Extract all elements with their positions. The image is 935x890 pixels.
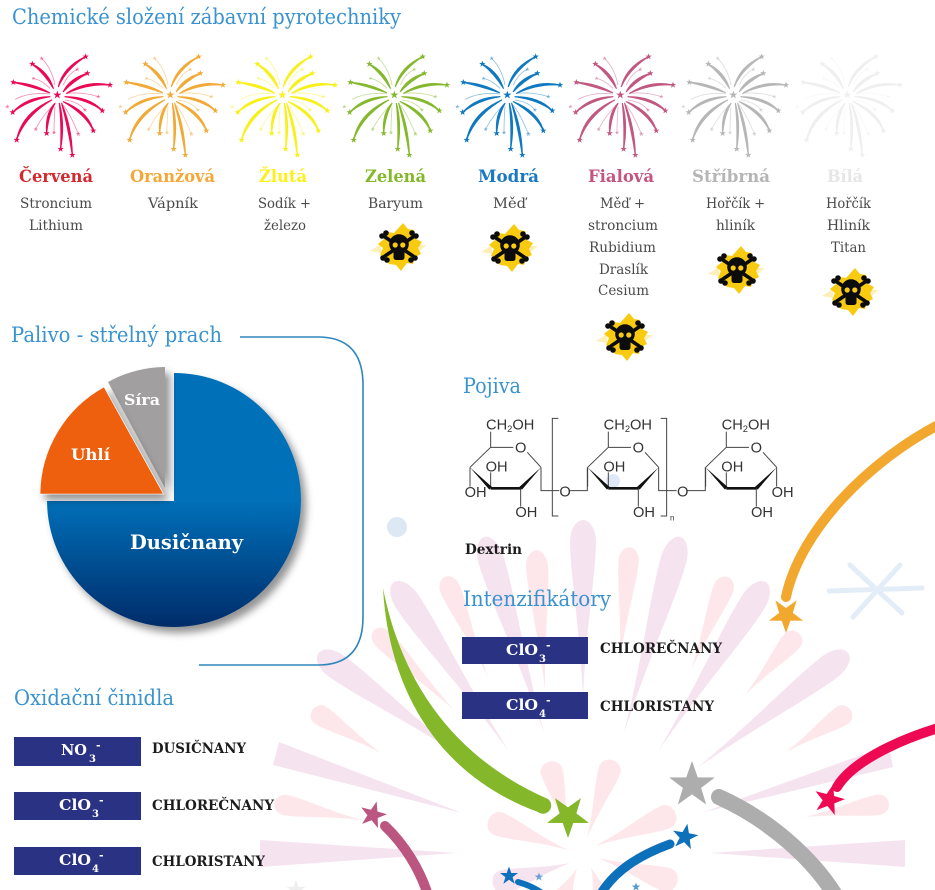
- colour column: oranžová: Vápník: [147, 196, 199, 212]
- shooting star: red: [811, 726, 935, 816]
- heading: palivo: Palivo - střelný prach: [11, 323, 222, 347]
- icon: toxic skull: [822, 268, 879, 316]
- colour column: bílá: Titan: [831, 240, 866, 256]
- intensifier row: ClO3: CHLOREČNANY: [600, 639, 723, 657]
- colour column: stříbrná: [692, 167, 770, 294]
- slice: síra: [108, 367, 165, 488]
- firework: červená: [5, 53, 113, 158]
- oxidiser row: ClO4: CHLORISTANY: [152, 854, 266, 870]
- chemical structure: dextrin: OH: [603, 460, 625, 476]
- colour column: zelená: Baryum: [368, 196, 423, 212]
- colour column: červená: Červená: [19, 166, 93, 186]
- chemical structure: dextrin: OH: [515, 505, 537, 521]
- shooting star: blue: [600, 821, 700, 890]
- intensifier row: ClO4: -: [546, 694, 551, 707]
- colour column: stříbrná: Stříbrná: [692, 167, 770, 186]
- intensifier row: ClO3: [462, 637, 723, 665]
- colour column: fialová: Cesium: [598, 283, 649, 299]
- oxidiser row: ClO3: CHLOREČNANY: [152, 796, 275, 814]
- title: Chemické složení zábavní pyrotechniky: [12, 5, 401, 29]
- colour column: žlutá: železo: [264, 218, 306, 234]
- icon: toxic skull: [370, 223, 427, 271]
- oxidiser row: ClO4: [14, 847, 266, 875]
- chemical structure: dextrin: 2: [743, 424, 748, 434]
- colour column: žlutá: Žlutá: [259, 166, 307, 186]
- chemical structure: dextrin: O: [677, 484, 688, 500]
- oxidiser row: ClO4: ClO: [59, 851, 91, 869]
- colour column: fialová: Draslík: [599, 262, 648, 278]
- chemical structure: dextrin: OH: [630, 417, 652, 433]
- heading: intenzifikátory: Intenzifikátory: [463, 587, 611, 611]
- chemical structure: dextrin: CH: [604, 417, 625, 433]
- chemical structure: dextrin: [465, 417, 794, 523]
- chemical structure: dextrin: OH: [512, 417, 534, 433]
- intensifier row: ClO3: -: [546, 639, 551, 652]
- colour column: fialová: Rubidium: [589, 240, 656, 256]
- chemical structure: dextrin: OH: [721, 460, 743, 476]
- firework: žlutá: [230, 53, 338, 158]
- chemical structure: dextrin: 2: [507, 424, 512, 434]
- oxidiser row: NO3: DUSIČNANY: [152, 739, 247, 757]
- firework: oranžová: [118, 53, 226, 158]
- chemical structure: dextrin: O: [633, 440, 644, 456]
- colour column: červená: Stroncium: [20, 196, 92, 212]
- colour column: bílá: Bílá: [827, 167, 863, 186]
- colour column: fialová: Měď +: [600, 196, 645, 212]
- chemical structure: dextrin: CH: [722, 417, 743, 433]
- oxidiser row: ClO3: ClO: [59, 796, 91, 814]
- colour column: fialová: Fialová: [588, 167, 654, 186]
- chemical structure: dextrin: n: [670, 514, 674, 523]
- colour column: fialová: stroncium: [588, 218, 658, 234]
- chemical structure: dextrin: OH: [748, 417, 770, 433]
- firework: modrá: [455, 53, 563, 158]
- icon: toxic skull: [708, 246, 765, 294]
- shooting star: orange: [769, 424, 935, 633]
- chemical structure: dextrin: OH: [751, 505, 773, 521]
- colour column: modrá: [478, 167, 539, 272]
- intensifier row: ClO4: 4: [539, 709, 546, 720]
- oxidiser row: NO3: [14, 737, 247, 766]
- slice: uhlí: [40, 387, 164, 494]
- intensifier row: ClO4: CHLORISTANY: [600, 699, 715, 715]
- oxidiser row: NO3: 3: [89, 754, 96, 765]
- chemical structure: dextrin: O: [751, 440, 762, 456]
- intensifier row: ClO4: [462, 692, 715, 720]
- colour column: fialová: [588, 167, 658, 361]
- chemical structure: dextrin: OH: [465, 485, 487, 501]
- oxidiser row: ClO4: 4: [92, 864, 99, 875]
- colour column: žlutá: Sodík +: [258, 196, 311, 212]
- chemical structure: dextrin: O: [559, 484, 571, 500]
- colour column: zelená: Zelená: [365, 167, 426, 186]
- colour column: oranžová: Oranžová: [130, 167, 215, 186]
- chemical structure: dextrin: OH: [772, 485, 794, 501]
- oxidiser row: ClO4: -: [99, 849, 104, 862]
- colour column: bílá: Hořčík: [826, 196, 871, 212]
- firework: bílá: [795, 53, 903, 158]
- intensifier row: ClO3: 3: [539, 654, 546, 665]
- icon: toxic skull: [596, 313, 653, 361]
- shooting star: magenta: [357, 798, 428, 890]
- intensifier row: ClO3: ClO: [506, 641, 538, 659]
- intensifier row: ClO4: ClO: [506, 696, 538, 714]
- colour column: modrá: Měď: [493, 196, 528, 212]
- background firework burst: [260, 474, 922, 890]
- oxidiser row: ClO3: [14, 792, 275, 820]
- colour column: bílá: Hliník: [827, 218, 871, 234]
- chemical structure: dextrin: OH: [633, 505, 655, 521]
- colour column: červená: Lithium: [29, 218, 83, 234]
- pie chart: střelný prach: Dusičnany: [130, 530, 244, 554]
- firework: stříbrná: [681, 53, 789, 158]
- heading: oxidační činidla: Oxidační činidla: [14, 686, 174, 710]
- colour column: zelená: [365, 167, 427, 271]
- shooting star: grey: [669, 761, 838, 890]
- heading: pojiva: Pojiva: [463, 374, 521, 398]
- pie chart: střelný prach: [40, 367, 301, 627]
- label: dextrin: Dextrin: [465, 542, 522, 558]
- colour column: červená: [19, 166, 93, 234]
- chemical structure: dextrin: CH: [486, 417, 507, 433]
- firework: zelená: [342, 53, 450, 158]
- shooting star: small blue: [500, 866, 640, 890]
- shooting star: green: [383, 588, 589, 838]
- colour column: stříbrná: Hořčík +: [706, 196, 765, 212]
- colour column: bílá: [822, 167, 879, 316]
- chemical structure: dextrin: 2: [625, 424, 630, 434]
- colour column: žlutá: [258, 166, 311, 234]
- pie chart: střelný prach: Síra: [124, 391, 160, 409]
- chemical structure: dextrin: O: [515, 440, 526, 456]
- chemical structure: dextrin: OH: [486, 460, 508, 476]
- oxidiser row: NO3: NO: [61, 741, 87, 759]
- colour column: oranžová: [130, 167, 215, 212]
- bracket around pie: [199, 337, 363, 665]
- oxidiser row: ClO3: -: [99, 794, 104, 807]
- oxidiser row: ClO3: 3: [92, 809, 99, 820]
- slice: dusičnany: [47, 373, 301, 627]
- colour column: modrá: Modrá: [478, 167, 539, 186]
- icon: toxic skull: [481, 224, 538, 272]
- firework: fialová: [568, 53, 676, 158]
- oxidiser row: NO3: -: [96, 739, 101, 752]
- colour column: stříbrná: hliník: [716, 218, 756, 234]
- pie chart: střelný prach: Uhlí: [71, 445, 110, 464]
